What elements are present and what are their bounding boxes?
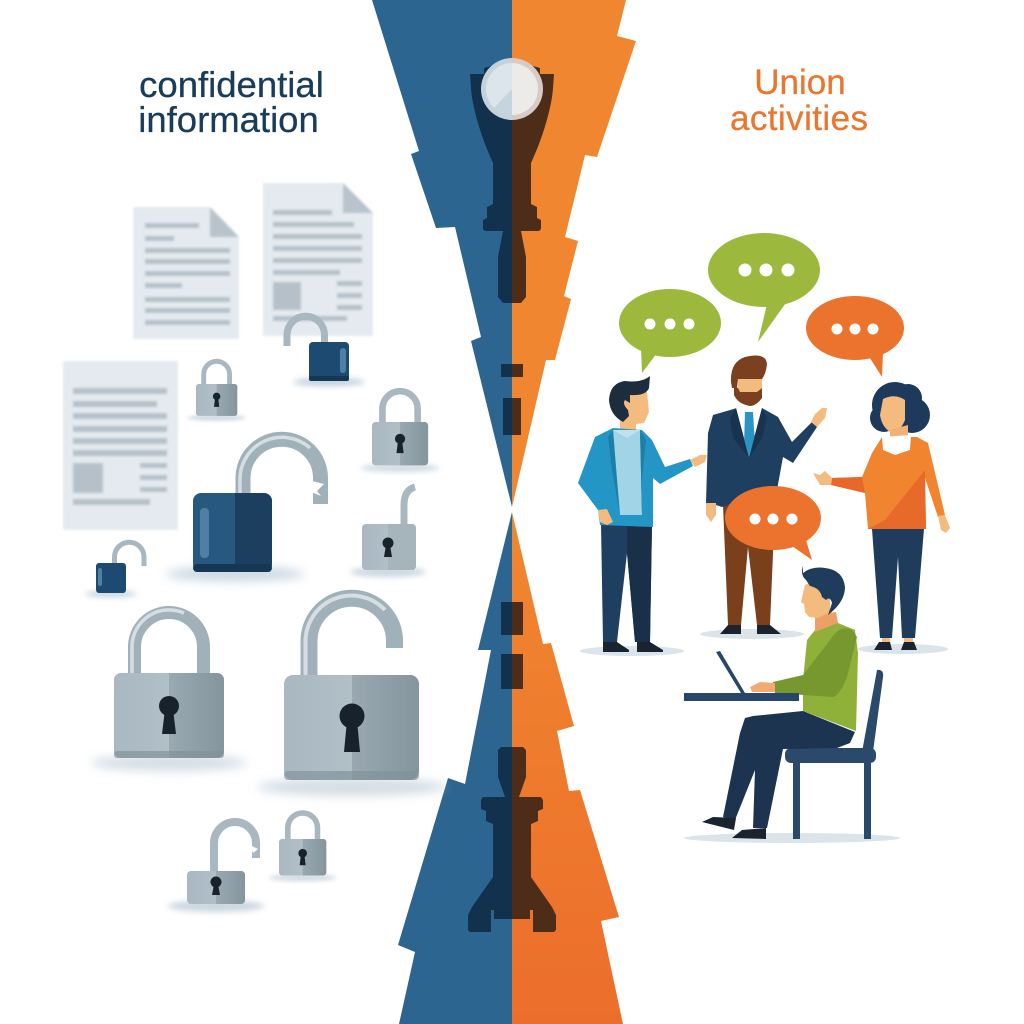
lock: tiny open navy: [85, 542, 144, 597]
heading: activities: activities: [730, 99, 868, 138]
speech bubble: orange right: [806, 296, 904, 377]
dash marks lower: [501, 602, 523, 689]
heading: confidential: confidential: [139, 64, 324, 105]
lower key silhouette, orange side: [512, 747, 556, 932]
person: man in navy suit: [700, 356, 827, 639]
blue lower wedge: [398, 512, 512, 1024]
person: woman in orange sweater: [813, 382, 950, 654]
lock: medium closed grey right: [360, 391, 440, 472]
chair: [785, 670, 883, 839]
lower key silhouette, blue side: [468, 747, 512, 932]
lock: small closed grey bottom: [269, 813, 336, 881]
person: man in blue jacket: [578, 376, 707, 656]
upper key silhouette, orange side: [512, 60, 554, 303]
lock: large open navy: [165, 437, 324, 581]
lock: small open navy upper: [287, 316, 365, 386]
dash marks upper: [501, 364, 523, 435]
lock: small closed grey top: [187, 361, 246, 421]
orange upper wedge: [512, 0, 636, 507]
person: seated man at laptop: [684, 566, 900, 843]
lock: large open grey: [257, 596, 447, 796]
neck and head: [815, 612, 838, 632]
lock: small open grey bottom: [168, 822, 264, 912]
key head lens: [481, 58, 543, 120]
table: [684, 693, 799, 701]
laptop: [716, 651, 745, 693]
lock: large closed grey: [91, 610, 247, 771]
sweater: [803, 623, 858, 731]
trousers: [723, 711, 855, 828]
speech bubble: green top: [708, 233, 820, 342]
central divider: blue and orange split: [372, 0, 636, 1024]
hand: [750, 682, 775, 692]
orange lower wedge: [512, 512, 623, 1024]
document 3: [63, 361, 178, 530]
document 1: [133, 207, 239, 339]
upper key silhouette, blue side: [470, 60, 512, 303]
lock: cut-off open grey: [350, 487, 426, 577]
blue upper wedge: [372, 0, 512, 507]
speech bubble: green left: [619, 289, 721, 373]
heading: Union: Union: [754, 63, 846, 102]
heading: information: information: [138, 99, 319, 140]
document 2: [263, 183, 373, 336]
speech bubble: orange centre: [725, 486, 821, 560]
